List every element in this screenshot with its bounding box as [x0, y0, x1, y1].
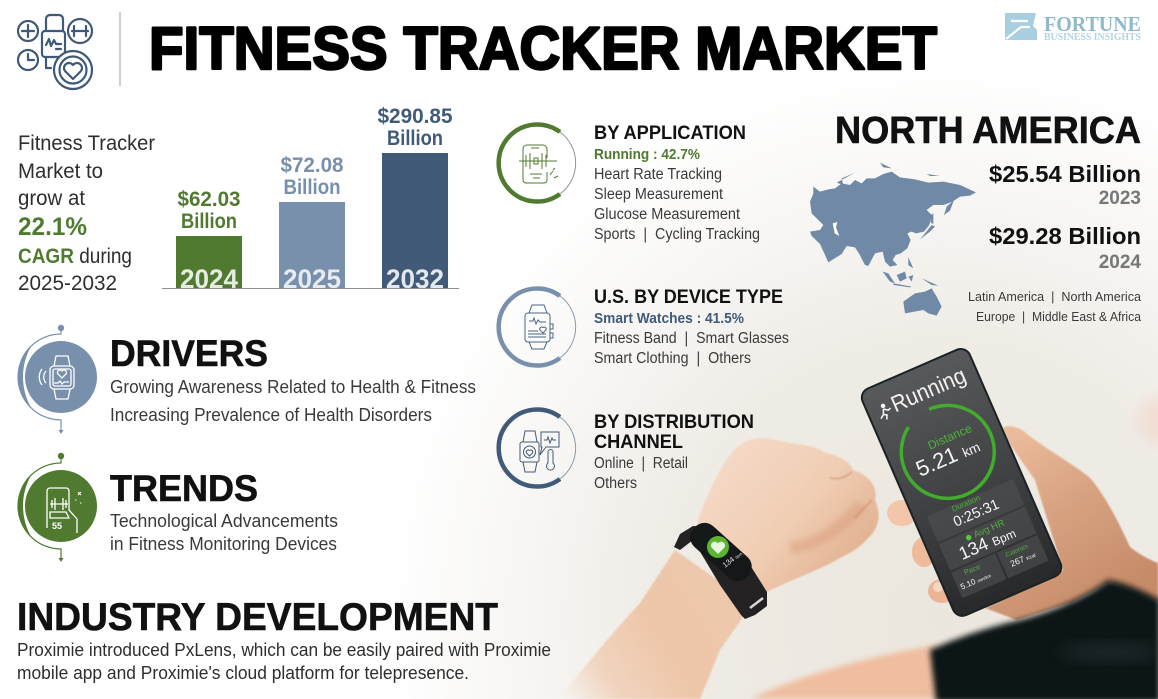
distribution text: BY DISTRIBUTION	[594, 411, 754, 433]
north america heading: NORTH AMERICA	[835, 110, 1141, 152]
CAGR text block: 22.1%	[18, 213, 87, 241]
by application text: Running : 42.7%	[594, 146, 700, 163]
header icon	[18, 15, 92, 89]
smartphone: Distance	[926, 421, 974, 453]
smartphone: Calories	[1005, 543, 1030, 559]
industry development heading: INDUSTRY DEVELOPMENT	[17, 596, 498, 639]
bar chart	[162, 105, 459, 294]
title: FITNESS TRACKER MARKET	[149, 15, 937, 82]
CAGR text block: Market to	[18, 159, 103, 183]
industry development text: Proximie introduced PxLens, which can be easily paired with Proximie	[17, 640, 551, 660]
by application text: Heart Rate Tracking	[594, 166, 722, 183]
by application text: BY APPLICATION	[594, 122, 746, 144]
bar 2024: $62.03	[178, 188, 240, 211]
regional values: $29.28 Billion	[989, 223, 1141, 249]
CAGR text block	[18, 131, 155, 295]
map: Asia Pacific	[810, 163, 976, 316]
logo: Fortune Business Insights: FORTUNE	[1044, 12, 1141, 36]
fitness band: 134 bpm	[721, 548, 744, 570]
bar 2032: Billion	[387, 127, 443, 150]
industry development text	[17, 640, 551, 683]
bar 2024	[176, 188, 242, 294]
device type text: Smart Clothing | Others	[594, 350, 751, 367]
device type text: Smart Watches : 41.5%	[594, 310, 744, 327]
trends text	[110, 511, 338, 554]
device type text	[594, 286, 789, 367]
regional values: 2023	[1099, 188, 1141, 209]
region list: Europe | Middle East & Africa	[976, 309, 1142, 324]
trends icon: 55	[52, 521, 62, 531]
regional values: $25.54 Billion	[989, 161, 1141, 187]
trends text: Technological Advancements	[110, 511, 338, 531]
bar 2025	[279, 154, 345, 294]
distribution text: Online | Retail	[594, 455, 688, 472]
trends icon	[18, 453, 97, 562]
industry development text: mobile app and Proximie's cloud platform for telepresence.	[17, 663, 469, 683]
running heading: Running	[887, 362, 970, 417]
region list	[968, 289, 1142, 324]
CAGR text block: 2025-2032	[18, 271, 117, 295]
logo: Fortune Business Insights: BUSINESS INSIGHTS	[1044, 32, 1141, 43]
distribution text	[594, 411, 754, 492]
trends heading: TRENDS	[110, 468, 258, 509]
fingers	[887, 500, 956, 603]
CAGR text block: grow at	[18, 186, 85, 210]
bar 2025: 2025	[283, 264, 341, 294]
by application text: Glucose Measurement	[594, 206, 741, 223]
CAGR text block: CAGR during	[18, 244, 132, 268]
header divider	[119, 12, 121, 86]
logo: Fortune Business Insights	[1005, 12, 1141, 43]
bar 2032: 2032	[386, 264, 444, 294]
by application text: Sleep Measurement	[594, 186, 724, 203]
regional values: 2024	[1099, 252, 1141, 273]
icon: device type ring	[499, 288, 576, 366]
bar 2024: Billion	[181, 210, 237, 233]
regional values	[989, 161, 1141, 273]
drivers text: Increasing Prevalence of Health Disorders	[110, 405, 432, 425]
smartphone: Pace	[963, 562, 982, 577]
trends text: in Fitness Monitoring Devices	[110, 534, 337, 554]
logo mark	[1005, 13, 1037, 40]
bar 2025: Billion	[284, 176, 340, 199]
distribution text: Others	[594, 475, 637, 492]
drivers heading: DRIVERS	[110, 333, 268, 374]
stat panels	[927, 479, 1049, 598]
fist	[697, 438, 879, 592]
smartphone: Duration	[950, 493, 982, 514]
band screen heart badge	[707, 536, 729, 558]
drivers icon	[18, 325, 97, 434]
drivers text	[110, 377, 476, 425]
region list: Latin America | North America	[968, 289, 1142, 304]
smartphone: 5.21 km	[912, 432, 983, 482]
CAGR text block: Fitness Tracker	[18, 131, 155, 155]
distance ring	[887, 391, 1009, 513]
smartphone: 267 Kcal	[1009, 549, 1037, 569]
holding hand	[985, 426, 1158, 620]
blurred foreground arm	[750, 645, 945, 699]
bar 2025: $72.08	[280, 154, 344, 177]
by application text: Sports | Cycling Tracking	[594, 226, 760, 243]
runner icon	[876, 402, 894, 422]
icon: distribution ring	[499, 410, 576, 486]
bar 2024: 2024	[180, 264, 238, 294]
distribution text: CHANNEL	[594, 431, 683, 453]
dark sleeve	[930, 580, 1158, 699]
faint blurred shape at right edge	[1138, 396, 1158, 444]
smartphone: Avg HR	[972, 518, 1007, 541]
smartphone: 5.10 min/km	[959, 570, 993, 592]
device type text: U.S. BY DEVICE TYPE	[594, 286, 783, 308]
icon: application ring	[499, 124, 576, 202]
photo: hands, fitness band and phone	[558, 345, 1158, 699]
forearm	[558, 550, 760, 699]
by application text	[594, 122, 760, 243]
fitness band	[674, 518, 767, 619]
drivers text: Growing Awareness Related to Health & Fitness	[110, 377, 476, 397]
smartphone: 0:25:31	[951, 497, 1002, 531]
bar 2032	[378, 105, 453, 294]
smartphone: 134 Bpm	[956, 522, 1018, 564]
device type text: Fitness Band | Smart Glasses	[594, 330, 789, 347]
bar 2032: $290.85	[378, 105, 453, 128]
smartphone	[857, 345, 1066, 620]
